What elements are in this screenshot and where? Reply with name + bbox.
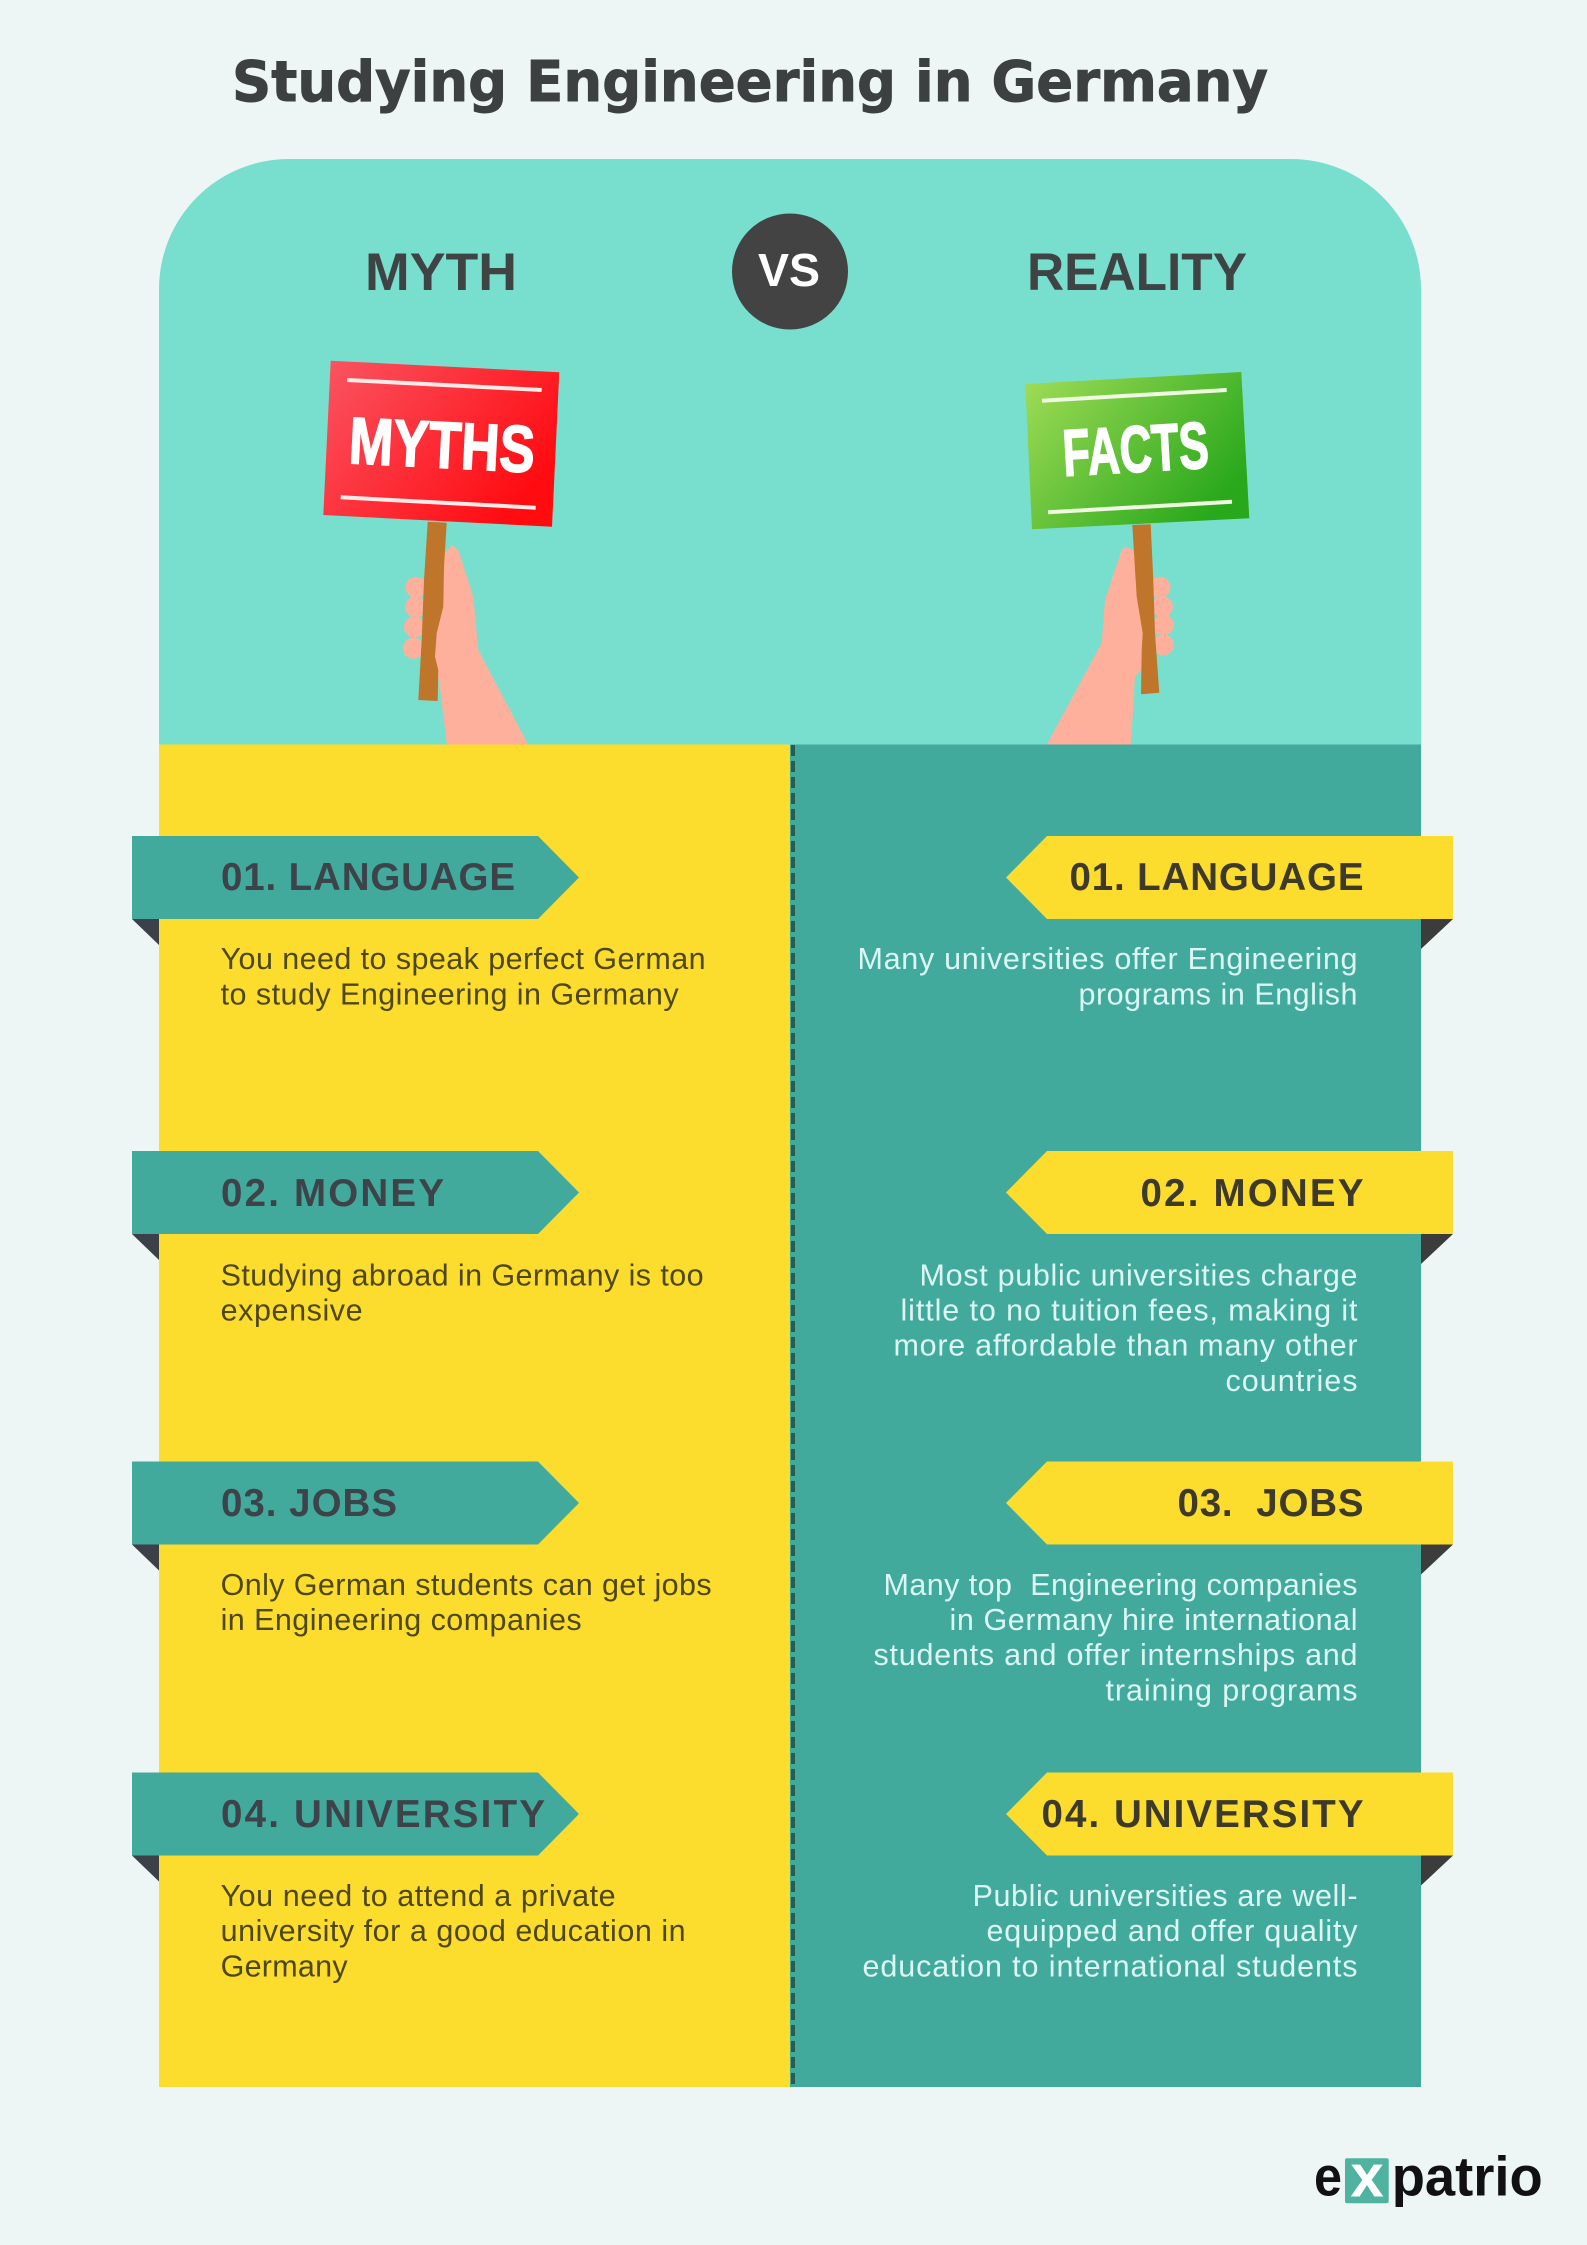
myth 02: money: Studying abroad in Germany is too <box>221 1258 704 1292</box>
illustration: hand holding facts sign <box>1025 372 1249 748</box>
reality 02: money: 02. MONEY <box>1140 1172 1364 1215</box>
myth 01: language: 01. LANGUAGE <box>221 856 515 899</box>
reality 04: university: equipped and offer quality <box>986 1914 1358 1948</box>
reality 04: university <box>862 1772 1453 1984</box>
illustration: hand holding myths sign <box>323 361 559 745</box>
myth 01: language: to study Engineering in Germany <box>221 978 679 1012</box>
reality 03: jobs: in Germany hire international <box>950 1603 1358 1637</box>
badge: VS: VS <box>758 244 820 296</box>
myth 01: language <box>132 836 706 1012</box>
logo: expatrio: x <box>1350 2142 1384 2210</box>
myth 04: university <box>132 1772 686 1984</box>
myth 01: language: You need to speak perfect German <box>221 942 706 976</box>
badge: VS <box>732 214 848 330</box>
logo: expatrio <box>1314 2142 1543 2210</box>
panel: myth column <box>159 744 790 2087</box>
heading: myth: MYTH <box>365 243 517 302</box>
myth 04: university: You need to attend a private <box>221 1879 616 1913</box>
reality 03: jobs: students and offer internships and <box>874 1638 1358 1672</box>
illustration: hand holding myths sign: MYTHS <box>347 403 537 486</box>
reality 02: money: more affordable than many other <box>894 1328 1358 1362</box>
reality 03: jobs: Many top Engineering companies <box>884 1568 1358 1602</box>
reality 03: jobs: training programs <box>1106 1674 1358 1708</box>
myth 02: money <box>132 1151 704 1328</box>
reality 02: money: countries <box>1226 1364 1358 1398</box>
myth 03: jobs: Only German students can get jobs <box>221 1568 712 1602</box>
myth 04: university: Germany <box>221 1950 348 1984</box>
panel: reality column <box>790 744 1421 2087</box>
logo: expatrio: e <box>1314 2145 1342 2208</box>
myth 02: money: expensive <box>221 1294 363 1328</box>
illustration: hand holding facts sign: FACTS <box>1061 408 1211 490</box>
panel: header background <box>159 159 1421 745</box>
reality 03: jobs: 03. JOBS <box>1178 1482 1364 1525</box>
myth 03: jobs <box>132 1462 712 1637</box>
myth 04: university: 04. UNIVERSITY <box>221 1793 545 1836</box>
reality 01: language <box>858 836 1453 1012</box>
reality 01: language: 01. LANGUAGE <box>1070 856 1364 899</box>
reality 01: language: programs in English <box>1078 978 1358 1012</box>
reality 02: money: Most public universities charge <box>920 1258 1358 1292</box>
myth 04: university: university for a good education in <box>221 1914 686 1948</box>
reality 04: university: 04. UNIVERSITY <box>1042 1793 1364 1836</box>
reality 03: jobs <box>874 1462 1453 1708</box>
reality 01: language: Many universities offer Engineering <box>858 942 1358 976</box>
myth 03: jobs: in Engineering companies <box>221 1603 582 1637</box>
reality 02: money <box>894 1151 1453 1398</box>
reality 04: university: education to international students <box>862 1950 1358 1984</box>
title: Studying Engineering in Germany <box>232 50 1268 115</box>
myth 03: jobs: 03. JOBS <box>221 1482 397 1525</box>
myth 02: money: 02. MONEY <box>221 1172 444 1215</box>
reality 02: money: little to no tuition fees, making it <box>900 1294 1358 1328</box>
heading: reality: REALITY <box>1027 243 1247 302</box>
reality 04: university: Public universities are well- <box>972 1879 1358 1913</box>
logo: expatrio: patrio <box>1392 2145 1543 2208</box>
